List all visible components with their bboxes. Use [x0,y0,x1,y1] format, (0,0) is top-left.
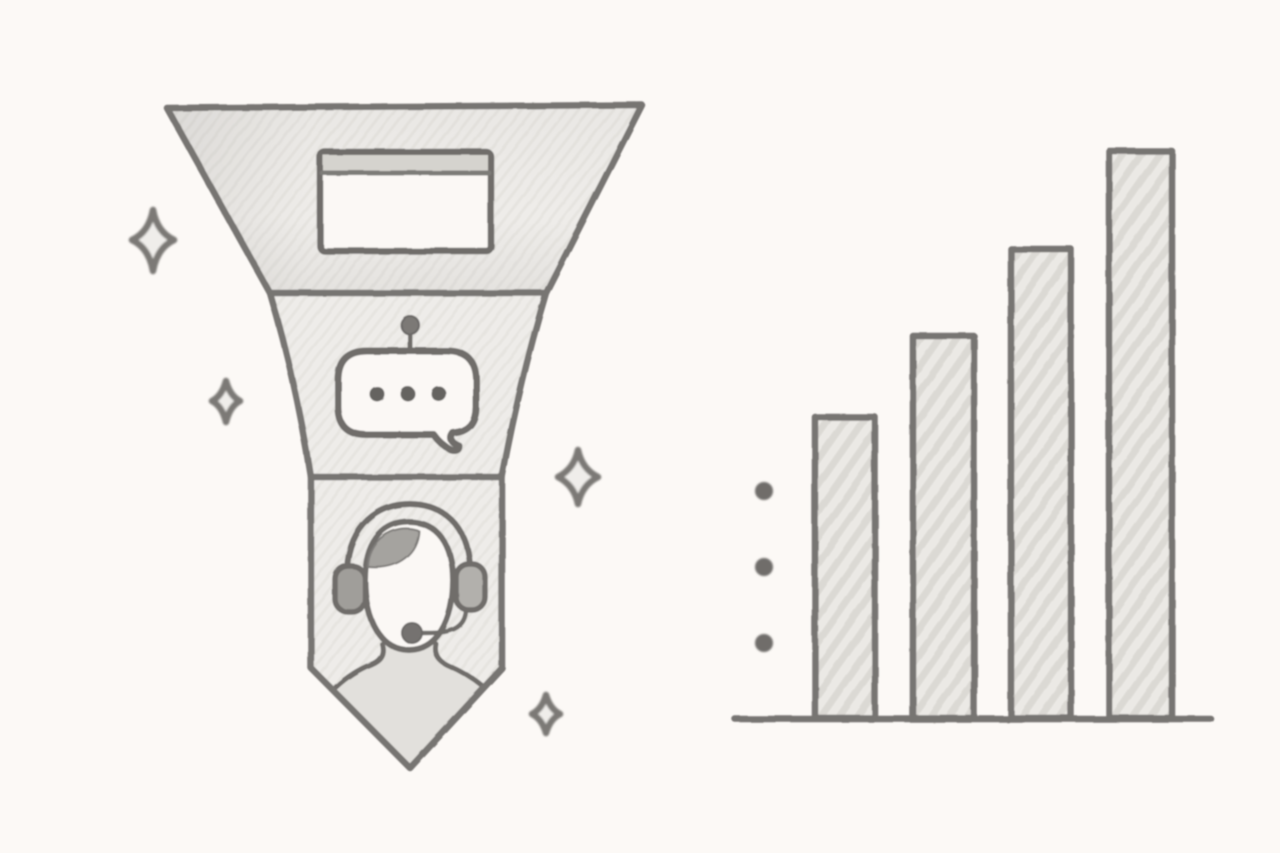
sparkle: right of funnel [558,450,598,504]
bar 2 [913,336,974,718]
funnel [167,105,642,768]
sparkle: upper left [132,210,174,271]
bar 3 [1011,249,1071,718]
sparkles [132,210,598,733]
funnel dividers [270,293,546,477]
icon: browser window [320,152,491,251]
sparkle: middle left [212,381,240,422]
bar 1 [815,417,875,718]
icon: chatbot speech bubble [338,316,476,450]
funnel middle section: chatbot [270,293,546,477]
axis dots [755,482,773,652]
bar chart [735,151,1211,719]
funnel outline [167,105,642,768]
chart baseline [735,716,1211,722]
funnel bottom section: support agent [311,477,502,768]
sparkle: lower right [532,695,560,733]
icon: support agent with headset [316,504,502,768]
bar 4 [1109,151,1172,718]
funnel top section: browser window [167,105,642,293]
